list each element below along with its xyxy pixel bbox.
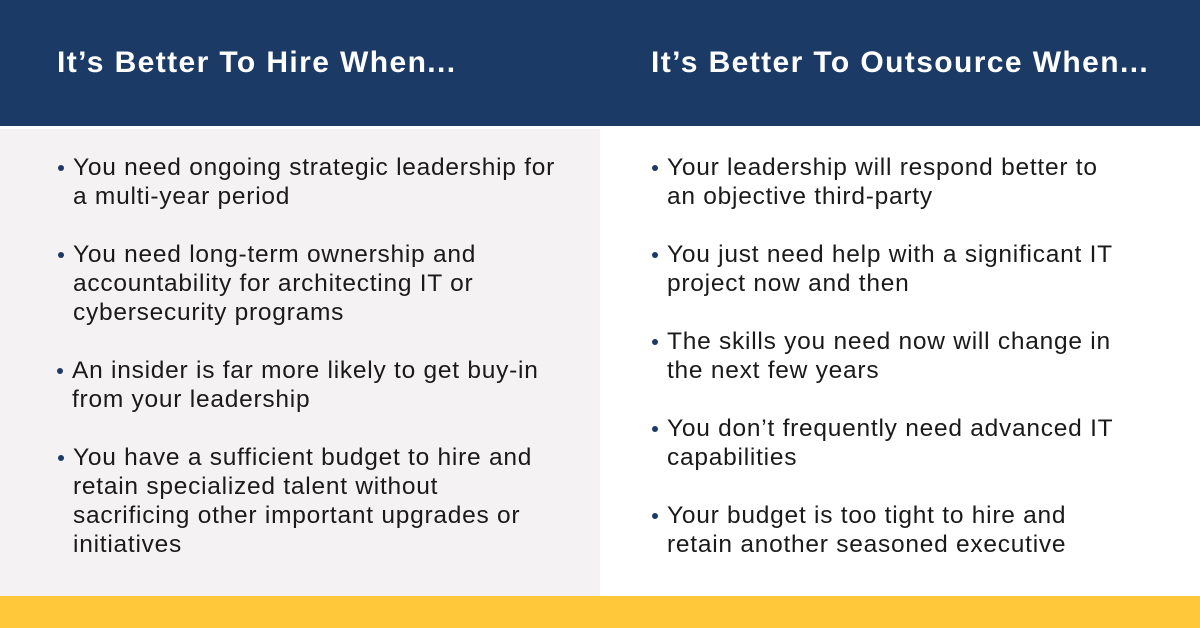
bullet: hire 2 [58,241,476,326]
panel: hire [0,129,600,596]
bullet: hire 4: sacrificing other important upgrades or [73,502,520,529]
bullet: out 3: The skills you need now will change in [667,328,1111,355]
bullet: hire 1 [58,154,555,210]
bullet: out 2: You just need help with a significant IT [667,241,1113,268]
bullet: hire 2: accountability for architecting IT or [73,270,473,297]
bullet: hire 3 [57,357,539,413]
bullet: out 1: an objective third-party [667,183,933,210]
heading: outsource: It’s Better To Outsource When... [651,46,1149,79]
bullet: out 1 [652,154,1098,210]
header band [0,0,1200,126]
bullet: out 4 [652,415,1113,471]
heading: hire: It’s Better To Hire When... [57,46,456,79]
bullet: out 4: You don’t frequently need advanced IT [667,415,1113,442]
bullet: hire 4: retain specialized talent without [73,473,438,500]
bullet: out 4: capabilities [667,444,797,471]
bullet: hire 4: You have a sufficient budget to hire and [73,444,532,471]
bullet: hire 2: You need long-term ownership and [73,241,476,268]
bullet: out 2: project now and then [667,270,909,297]
bullet: hire 2: cybersecurity programs [73,299,344,326]
bullet: hire 4: initiatives [73,531,182,558]
bullet: out 5: retain another seasoned executive [667,531,1066,558]
footer bar [0,596,1200,628]
bullet: hire 1: You need ongoing strategic leadership for [73,154,555,181]
bullet: out 2 [652,241,1113,297]
bullet: hire 3: from your leadership [72,386,310,413]
bullet: hire 3: An insider is far more likely to get buy-in [72,357,539,384]
bullet: out 3: the next few years [667,357,879,384]
bullet: hire 1: a multi-year period [73,183,290,210]
bullet: out 3 [652,328,1111,384]
bullet: hire 4 [58,444,532,558]
bullet: out 1: Your leadership will respond better to [667,154,1098,181]
bullet: out 5 [652,502,1066,558]
bullet: out 5: Your budget is too tight to hire and [667,502,1066,529]
